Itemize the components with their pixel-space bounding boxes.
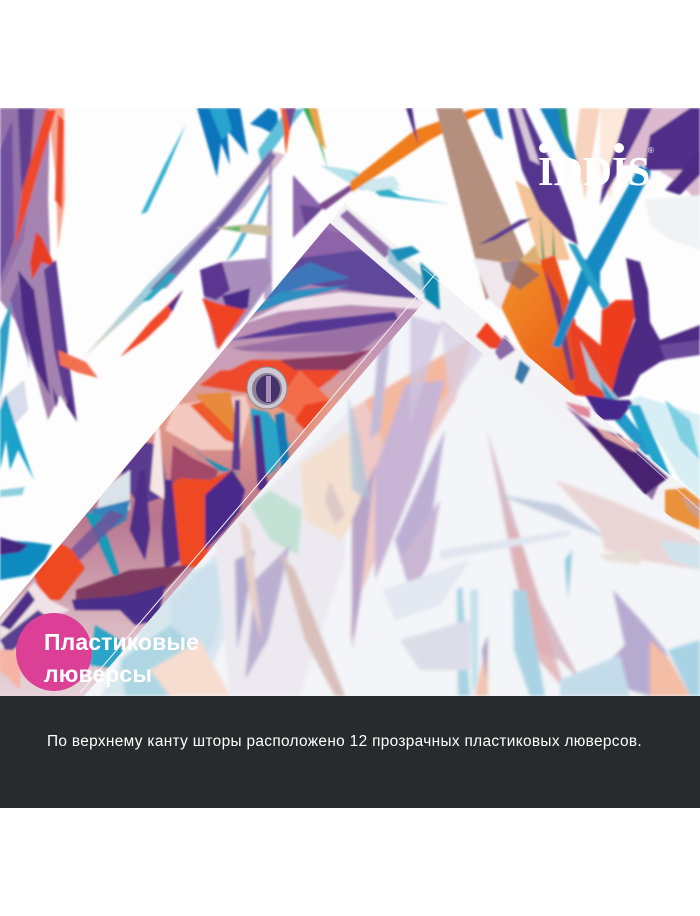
blue X strokes [552, 165, 651, 348]
band middle red and blue strokes [95, 392, 330, 520]
badge heading [44, 629, 199, 687]
pink circle [16, 613, 92, 691]
printed patches seen on hem [340, 210, 700, 530]
stitched seam lines [80, 268, 700, 693]
badge heading: люверсы [44, 661, 152, 687]
icon: plastic grommet [247, 367, 287, 409]
photo: folded shower curtain corner [0, 108, 700, 696]
orange and red flower [473, 255, 640, 400]
band lower purple and red strokes [0, 470, 245, 690]
blue thin shards [457, 586, 470, 696]
peach fan [350, 335, 475, 640]
band top purple stripes [200, 228, 430, 420]
long diagonal streak [83, 150, 285, 358]
purple tent shape [200, 258, 272, 350]
teal pieces right of hem [350, 172, 450, 204]
lilac and peach bottom right [612, 590, 669, 696]
callout badge: plastic grommets [16, 613, 199, 691]
lower right cyan strokes [628, 396, 700, 498]
logo: IDDIS: ® [648, 146, 654, 155]
caption panel [0, 696, 700, 808]
pale blue wash bottom left [101, 566, 220, 696]
central dark and blue strokes [478, 108, 635, 300]
tall pink shard [487, 430, 580, 680]
top blue shards [197, 108, 328, 177]
left stroke cluster [0, 108, 98, 480]
pale green and peach patches [250, 490, 302, 555]
white folded hem [330, 203, 700, 543]
dark plume [580, 258, 700, 455]
faded pink smear right [555, 480, 700, 570]
small cyan dash [141, 124, 186, 214]
small red dash [120, 290, 183, 357]
bottom left blue smear [0, 540, 52, 580]
badge heading: Пластиковые [44, 629, 199, 655]
translucent curtain sheet [84, 303, 700, 696]
printed hem band [0, 200, 440, 700]
caption text: По верхнему канту шторы расположено 12 прозрачных пластиковых люверсов. [47, 733, 642, 750]
orange diagonal [350, 108, 490, 192]
artwork: printed background strokes [0, 108, 700, 580]
tan wedge [436, 108, 530, 300]
hem purple triangle [293, 175, 323, 238]
lilac vertical strokes [235, 550, 255, 650]
far right purple shards [600, 108, 700, 250]
logo: IDDIS: IDDIS [538, 148, 650, 194]
